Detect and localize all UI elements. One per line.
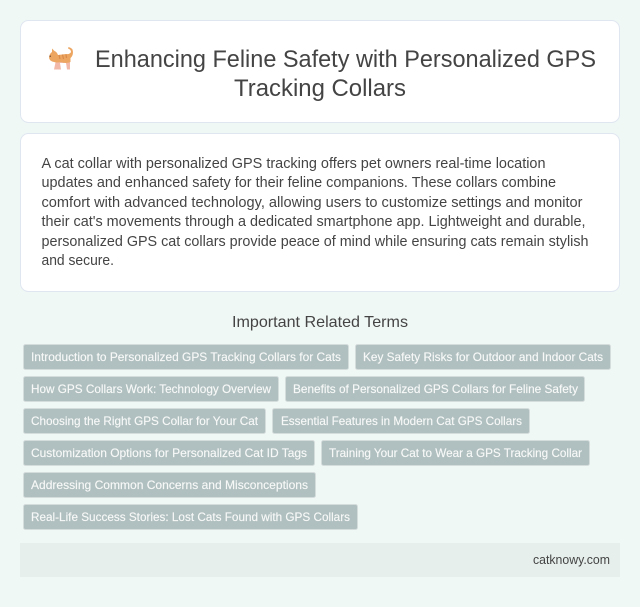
text block: description: comfort with advanced technology, allowing users to customize settings and monitor [42,194,583,211]
tag: Customization Options for Personalized Cat ID Tags [31,446,307,460]
tag: How GPS Collars Work: Technology Overview [31,382,271,396]
tag: Essential Features in Modern Cat GPS Collars [281,414,522,428]
tag [24,472,316,498]
tag [356,344,610,370]
heading: Enhancing Feline Safety with Personalized GPS [95,46,596,73]
tag [24,376,278,402]
icon: cat [49,47,73,70]
text block: description: their cat's movements through a dedicated smartphone app. Lightweight and durable, [42,213,586,230]
tag [24,408,266,434]
text block: description [42,155,588,269]
tag [24,344,348,370]
tag list [24,344,610,530]
tag: Benefits of Personalized GPS Collars for Feline Safety [293,382,578,396]
tag: Addressing Common Concerns and Misconceptions [31,478,308,492]
tag: Training Your Cat to Wear a GPS Tracking Collar [329,446,582,460]
tag: Real-Life Success Stories: Lost Cats Found with GPS Collars [31,510,350,524]
panel: title [20,20,620,122]
heading: Tracking Collars [234,75,406,102]
tag: Key Safety Risks for Outdoor and Indoor Cats [363,350,603,364]
text block: description: A cat collar with personalized GPS tracking offers pet owners real-time location [42,155,546,172]
footer [20,543,620,577]
text block: description: updates and enhanced safety for their feline companions. These collars combine [42,174,556,191]
text block: description: personalized GPS cat collars provide peace of mind while ensuring cats remain stylish [42,233,588,250]
heading [95,46,596,102]
panel: description [20,134,620,292]
tag [272,408,530,434]
tag: Introduction to Personalized GPS Tracking Collars for Cats [31,350,341,364]
tag [322,440,590,466]
footer: catknowy.com [533,552,610,567]
tag: Choosing the Right GPS Collar for Your Cat [31,414,259,428]
heading: related terms: Important Related Terms [232,314,408,331]
tag [286,376,584,402]
text block: description: and secure. [42,252,114,269]
tag [24,504,358,530]
tag [24,440,314,466]
